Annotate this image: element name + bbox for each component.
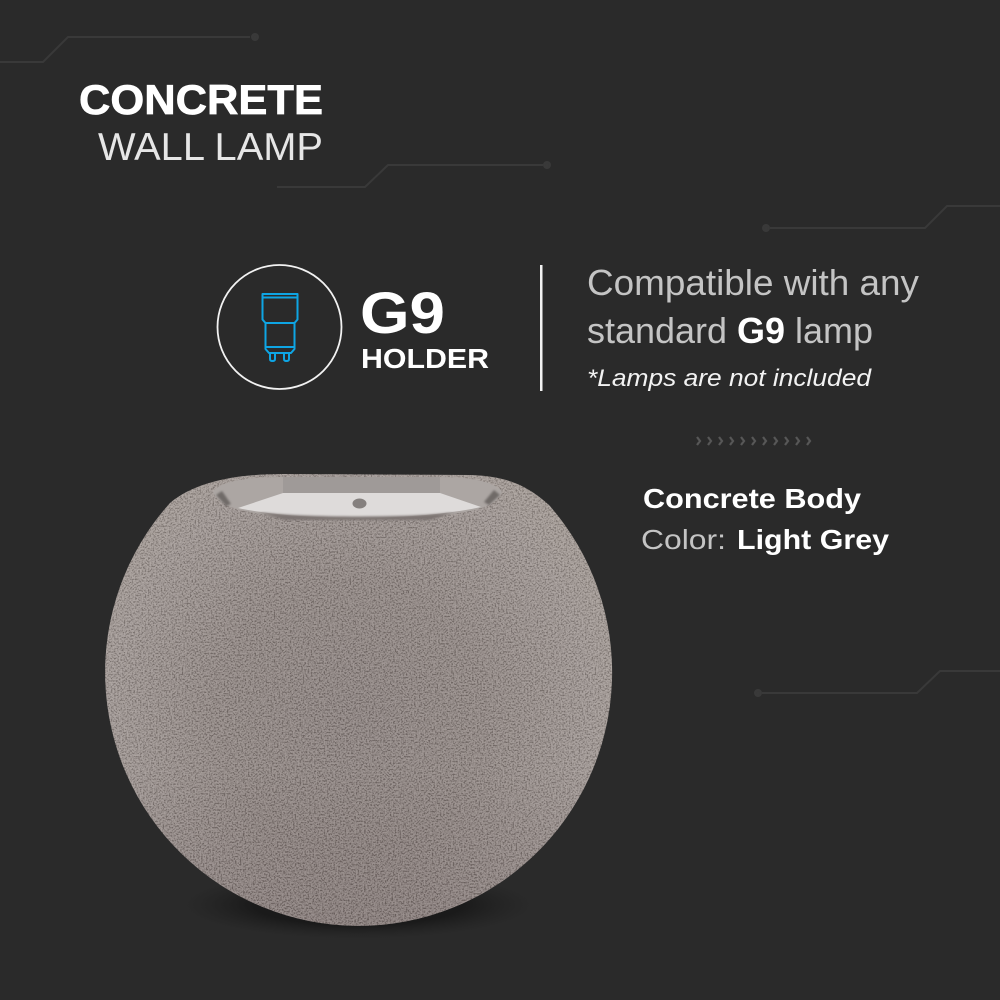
material and color text [641, 483, 889, 555]
compatibility text: Compatible with any [587, 262, 919, 303]
lamp body [100, 470, 620, 930]
title [79, 76, 323, 169]
shadow under lamp [183, 871, 533, 939]
decorative circuit line: under title [277, 162, 550, 187]
material and color text: Concrete Body [643, 483, 861, 514]
title: WALL LAMP [98, 126, 323, 169]
decorative circuit line: top left [0, 34, 258, 62]
G9 holder label [360, 281, 489, 374]
decorative circuit line: lower right [755, 671, 1000, 696]
decorative circuit line: upper right [763, 206, 1000, 231]
material and color text: Color: [641, 524, 726, 555]
title: CONCRETE [79, 76, 323, 123]
G9 holder label: G9 [360, 281, 445, 346]
chevron row [697, 437, 810, 445]
compatibility text [587, 262, 919, 392]
lamp top opening [213, 477, 502, 520]
divider [540, 265, 542, 391]
lamp: concrete sphere [100, 470, 620, 930]
compatibility text: standard G9 lamp [587, 310, 873, 351]
compatibility text: *Lamps are not included [587, 365, 872, 392]
material and color text: Light Grey [737, 524, 889, 555]
G9 holder label: HOLDER [361, 343, 489, 374]
icon: G9 bulb in circle [218, 265, 342, 389]
